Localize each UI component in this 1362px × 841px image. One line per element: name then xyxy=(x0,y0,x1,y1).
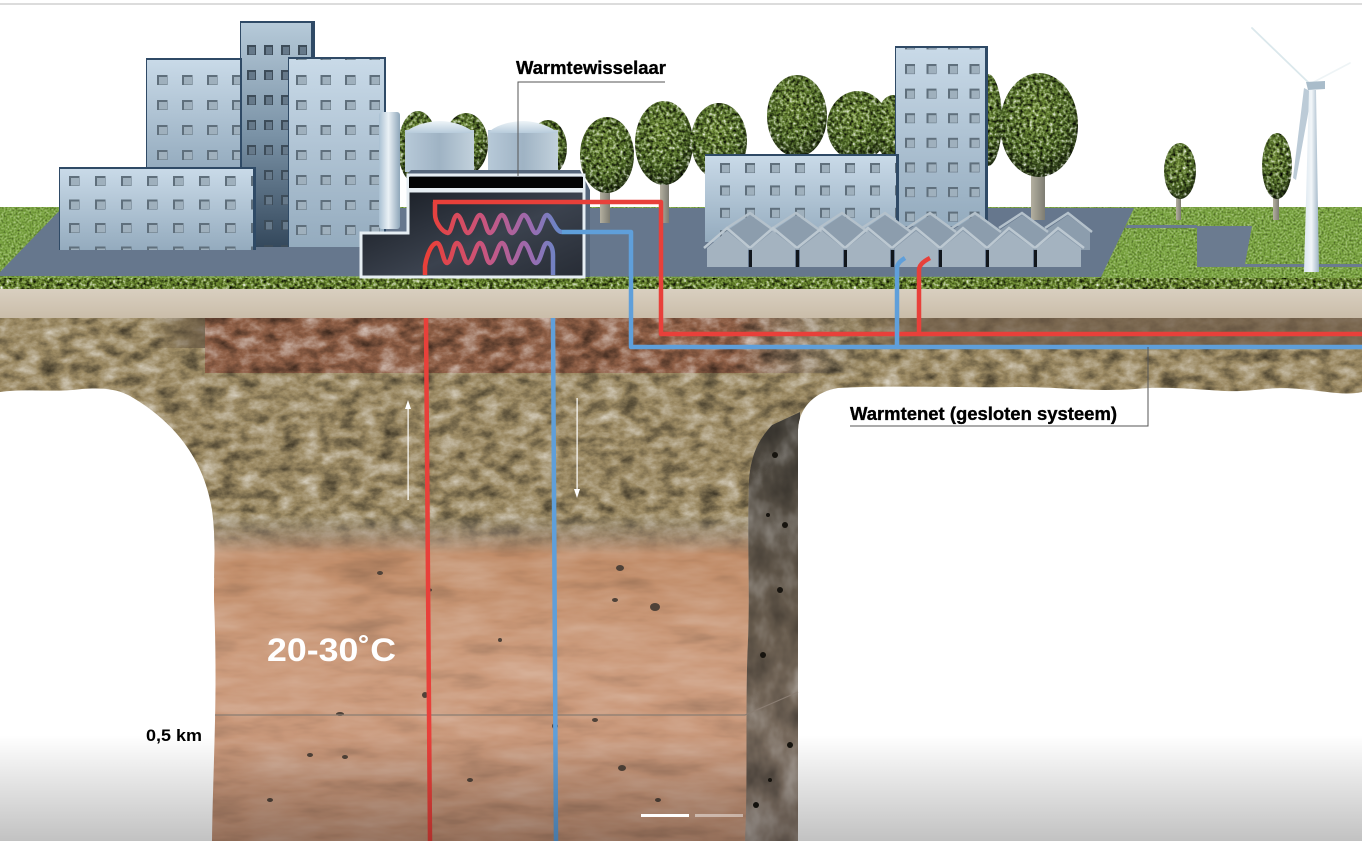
dark patch left xyxy=(157,318,205,348)
tall building xyxy=(895,46,988,226)
wide building xyxy=(705,154,899,242)
greenhouses xyxy=(704,213,1092,267)
pipes xyxy=(426,202,1362,841)
low front block xyxy=(59,167,256,250)
depth label: 0,5 km xyxy=(146,726,202,745)
building group: right block xyxy=(705,46,988,242)
red supply pipe xyxy=(433,202,1362,334)
tower brace xyxy=(1293,88,1312,180)
panel: heat exchanger building xyxy=(361,170,590,277)
tree trunks xyxy=(600,170,1279,223)
depth line xyxy=(215,692,798,715)
clay layer xyxy=(212,520,749,841)
base sandy soil xyxy=(0,318,1362,578)
dark band right xyxy=(840,318,1362,346)
callout: Warmtewisselaar: Warmtewisselaar xyxy=(516,58,666,78)
tower back xyxy=(240,21,315,247)
front row walls xyxy=(707,231,1081,267)
callout: Warmtenet: Warmtenet (gesloten systeem) xyxy=(850,404,1117,424)
beige layer xyxy=(0,289,1362,318)
red branch xyxy=(919,258,930,334)
hall interior xyxy=(361,175,584,277)
tank left xyxy=(405,121,474,172)
red well pipe xyxy=(426,318,430,841)
stones in rock wall xyxy=(753,452,793,808)
back row walls xyxy=(725,215,1090,250)
bottom shading xyxy=(0,735,1362,841)
chimney xyxy=(379,112,400,229)
cobble band xyxy=(205,318,865,373)
panel: surface scene xyxy=(0,21,1362,318)
upper coil xyxy=(435,202,562,233)
back row roofs xyxy=(727,213,1092,232)
trees xyxy=(398,73,1292,223)
tank right xyxy=(488,121,558,172)
tower right xyxy=(288,57,386,247)
roof and side wall xyxy=(407,170,590,277)
background grass xyxy=(0,207,1362,279)
callout: Warmtewisselaar xyxy=(516,58,666,176)
stones in clay xyxy=(267,565,661,802)
tower left xyxy=(146,58,242,170)
panel: underground soil xyxy=(0,318,1362,841)
grass strip xyxy=(0,278,1362,289)
storage tanks xyxy=(405,121,558,172)
tower xyxy=(1304,90,1319,272)
temperature label: 20-30˚C xyxy=(267,632,396,668)
callout: Warmtenet xyxy=(850,347,1148,426)
wind turbine xyxy=(1252,28,1350,272)
paved paths xyxy=(1125,225,1362,267)
slide indicators xyxy=(641,814,743,817)
rotor blades xyxy=(1252,28,1350,84)
top rule xyxy=(0,3,1362,5)
tree canopies xyxy=(398,73,1292,199)
building group: left block xyxy=(59,21,400,250)
rock wall xyxy=(745,412,800,841)
front row roofs xyxy=(704,228,1084,248)
blue branch xyxy=(897,258,905,347)
dark gaps xyxy=(749,250,1037,267)
paved plaza xyxy=(0,208,1134,277)
blue well pipe xyxy=(553,318,556,841)
black ceiling band xyxy=(409,177,583,188)
arrow: upward flow xyxy=(405,400,411,500)
nacelle xyxy=(1306,81,1325,90)
white divider xyxy=(408,188,584,192)
lower coil xyxy=(425,243,553,275)
blue return pipe xyxy=(562,232,1362,347)
arrow: downward flow xyxy=(574,398,580,498)
